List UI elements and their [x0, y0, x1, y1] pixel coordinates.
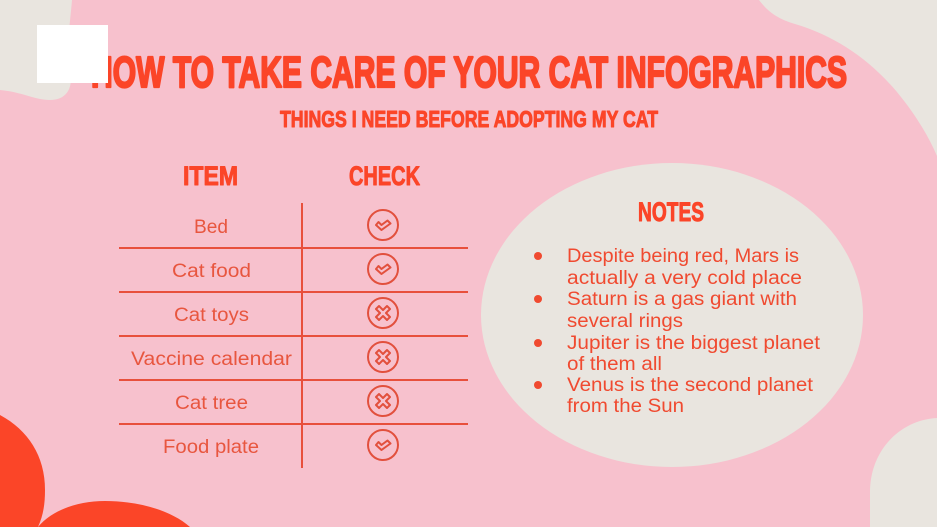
- row label: cat food: Cat food: [172, 261, 251, 282]
- panel: notes: [481, 163, 863, 467]
- column heading: check: CHECK: [349, 161, 420, 191]
- notes text: [567, 246, 821, 417]
- icon: check bed: [368, 210, 398, 240]
- row label: bed: Bed: [194, 217, 228, 238]
- row label: food plate: Food plate: [163, 437, 259, 458]
- row label: vaccine calendar: Vaccine calendar: [131, 349, 293, 370]
- notes background ellipse: [481, 163, 863, 467]
- notes text: actually a very cold place: [567, 268, 802, 289]
- icon: cross cat tree: [368, 386, 398, 416]
- notes text: from the Sun: [567, 396, 684, 417]
- blob: bottom left circle: [0, 415, 45, 527]
- icon: check food plate: [368, 430, 398, 460]
- notes text: Jupiter is the biggest planet: [567, 333, 821, 354]
- blob: top right: [759, 0, 937, 156]
- notes heading: NOTES: [638, 197, 704, 227]
- row label: cat toys: Cat toys: [174, 305, 249, 326]
- row label: cat tree: Cat tree: [175, 393, 248, 414]
- notes text: several rings: [567, 311, 683, 332]
- icon: cross vaccine calendar: [368, 342, 398, 372]
- column heading: item: ITEM: [183, 161, 238, 191]
- blob: top left: [0, 0, 72, 100]
- note bullets: [534, 252, 542, 389]
- notes text: of them all: [567, 354, 662, 375]
- blob: bottom left mound: [38, 501, 190, 527]
- notes text: Despite being red, Mars is: [567, 246, 799, 267]
- blob: bottom right: [870, 418, 937, 527]
- notes text: Venus is the second planet: [567, 375, 814, 396]
- checklist table: [119, 161, 468, 468]
- icon: cross cat toys: [368, 298, 398, 328]
- logo placeholder: [37, 25, 108, 83]
- notes text: Saturn is a gas giant with: [567, 289, 797, 310]
- subtitle: THINGS I NEED BEFORE ADOPTING MY CAT: [280, 106, 658, 132]
- icon: check cat food: [368, 254, 398, 284]
